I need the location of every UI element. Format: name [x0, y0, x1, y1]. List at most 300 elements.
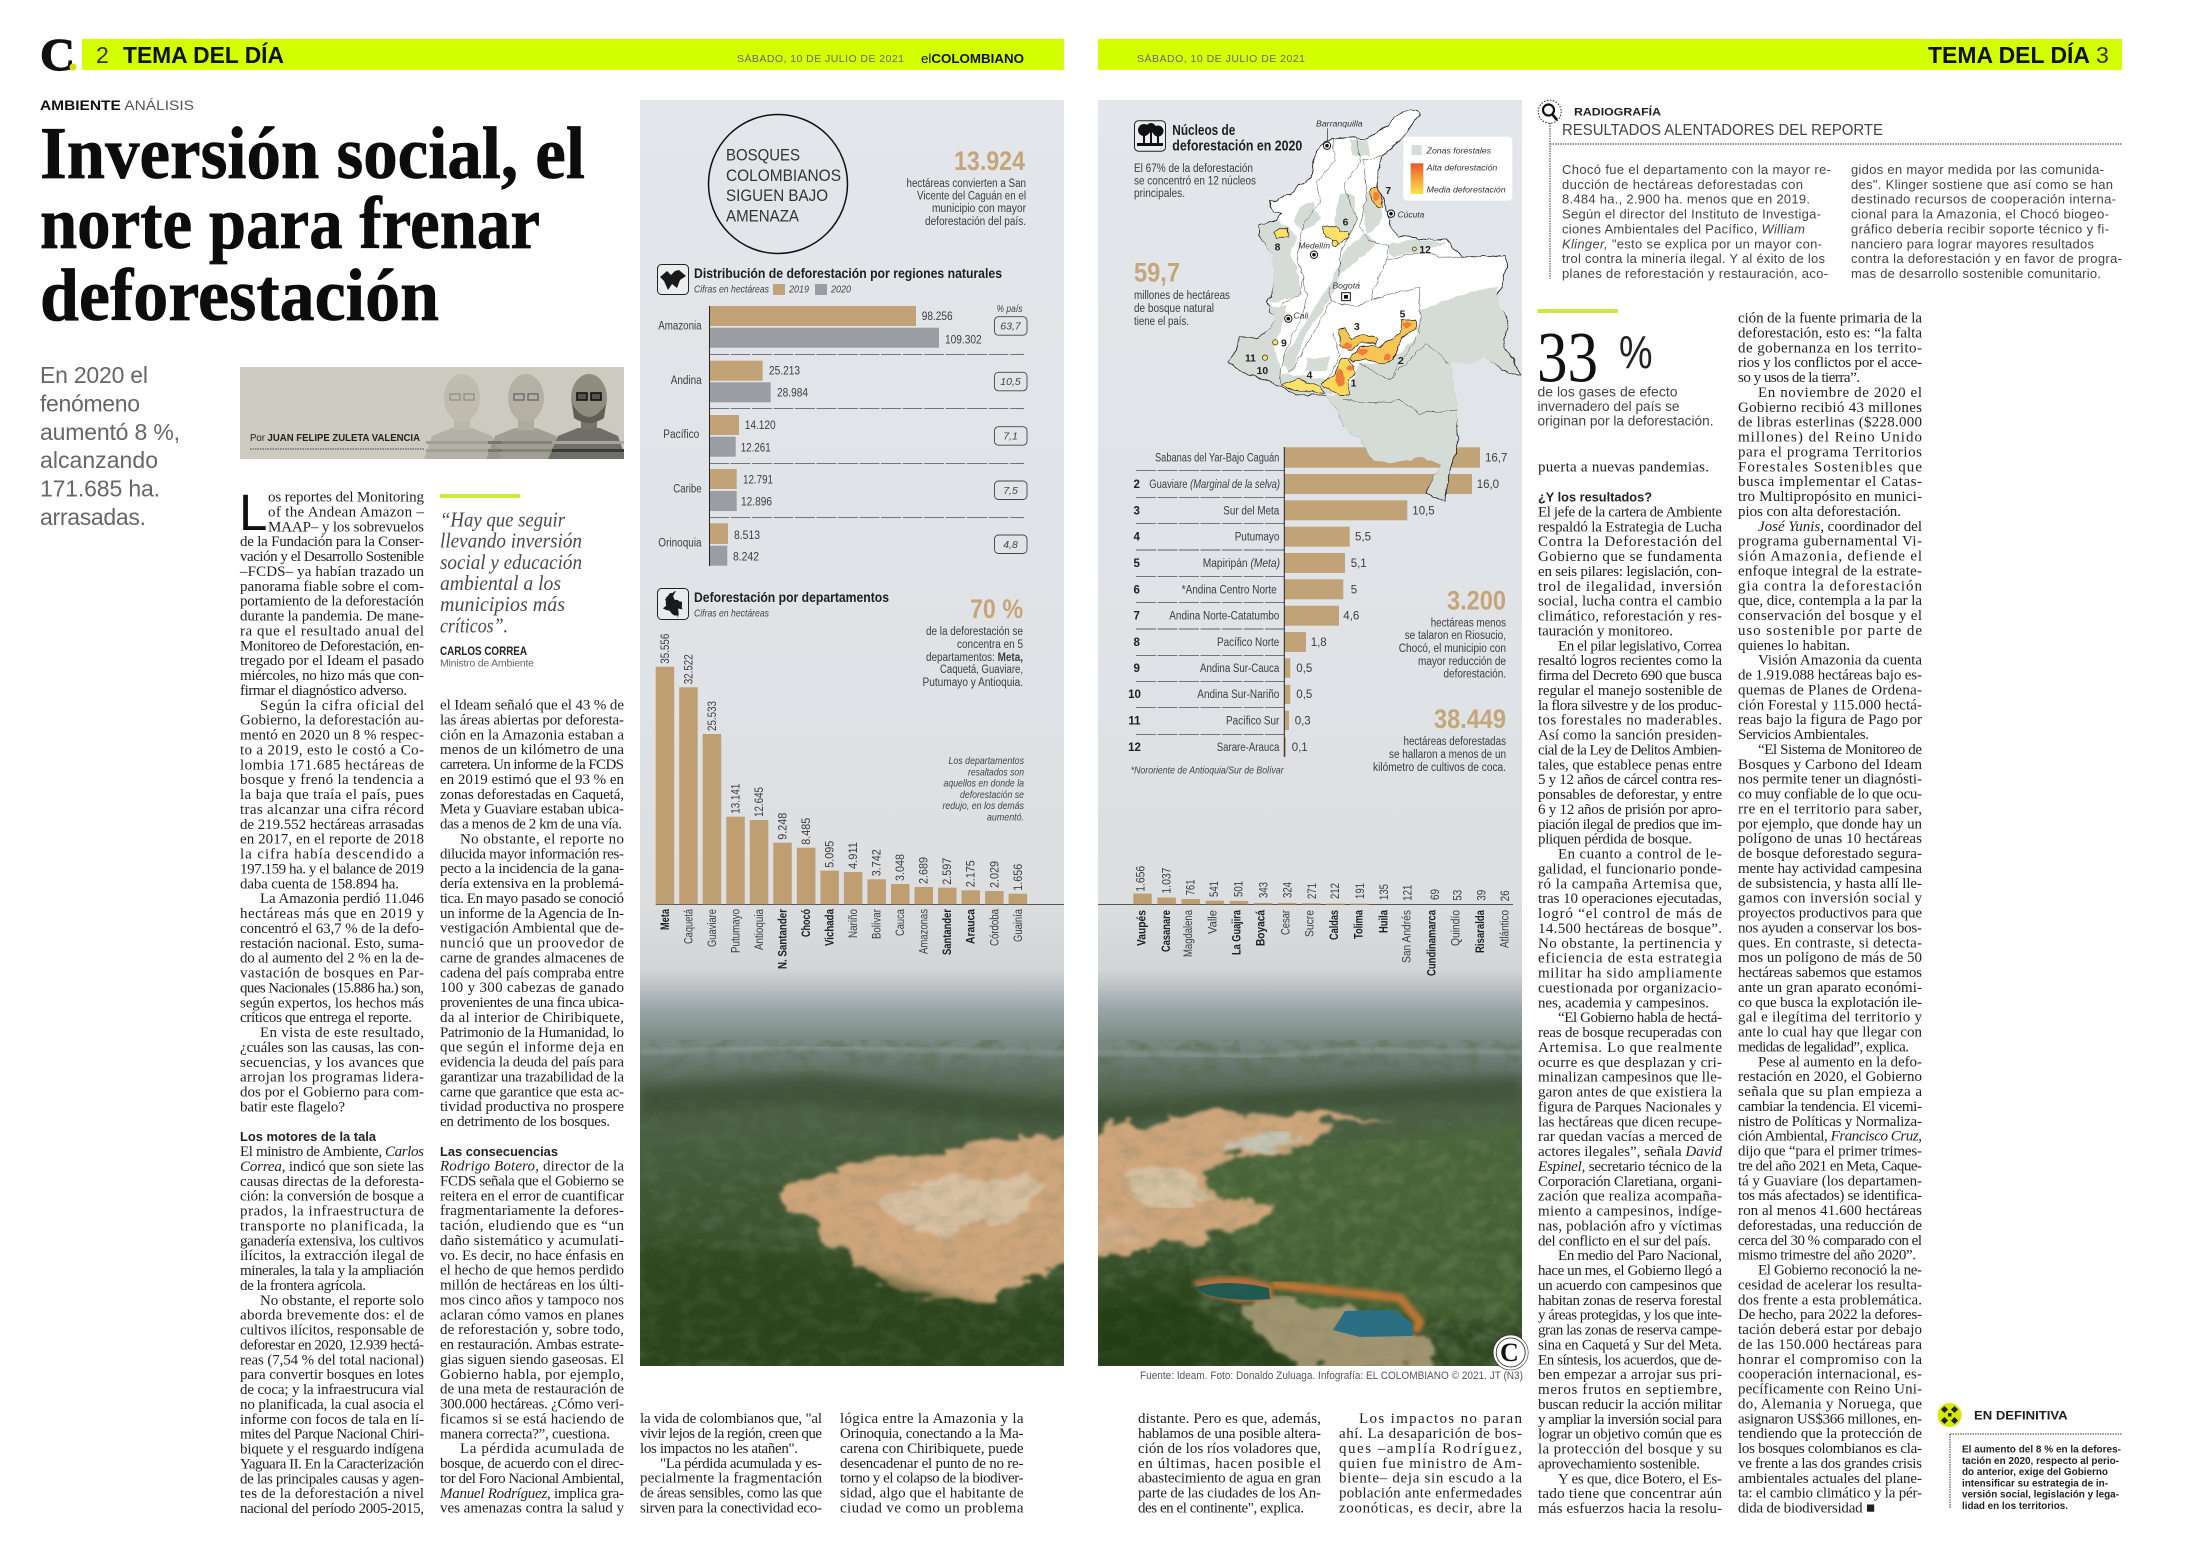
article column 4: de gobernanza en los territo- — [1738, 340, 1922, 356]
article column 1: miércoles, no hizo más que con- — [240, 668, 424, 684]
article column 1 continued: nacional del período 2005-2015, — [240, 1501, 424, 1517]
stat: 33 %: 33 — [1537, 318, 1598, 398]
article column 1 continued: cultivos ilícitos, responsable de — [240, 1322, 424, 1338]
article column 3: Artemisa. Lo que realmente — [1538, 1040, 1722, 1056]
bar chart: deforestation hubs: 4,6 — [1343, 611, 1359, 623]
callout: 38.449: hectáreas deforestadas — [1404, 736, 1506, 748]
article column 3: meros frutos en septiembre, — [1538, 1382, 1722, 1398]
bar chart: departments right: 53 — [1452, 890, 1464, 901]
article column 4: para el programa Territorios — [1738, 444, 1922, 460]
article column 1: tregado por el Ideam el pasado — [240, 653, 424, 669]
article column 2 continued: manera correcta?”, cuestiona. — [440, 1426, 610, 1442]
article column 3: Gobierno que se fundamenta — [1538, 549, 1722, 565]
bar chart: deforestation hubs: Guaviare (Marginal de la selva) — [1149, 479, 1280, 491]
map: colombia deforestation hubs: Barranquilla — [1316, 119, 1363, 129]
article column 3: militar ha sido ampliamente — [1538, 966, 1722, 982]
bottom columns under photo: right: en últimas, hacen posible el — [1138, 1456, 1321, 1472]
article column 3: minalizan campesinos que lle- — [1538, 1070, 1722, 1086]
callout: 38.449: 38.449 — [1434, 704, 1506, 734]
bar chart: regions: 4,8 — [1003, 539, 1018, 551]
article column 4: Forestales Sostenibles que — [1738, 459, 1922, 475]
infographic heading circle: BOSQUES — [726, 147, 800, 165]
article column 3: buscan reducir la acción militar — [1538, 1397, 1722, 1413]
article column 3: la protección del bosque y su — [1538, 1442, 1722, 1458]
bottom columns under photo: right: des en el continente", explica. — [1138, 1500, 1304, 1516]
bar chart: deforestation hubs: 2 — [1133, 479, 1140, 491]
article column 4: cambiar la tendencia. El vicemi- — [1738, 1099, 1922, 1115]
bar chart: departments right: Cundinamarca — [1426, 910, 1438, 976]
article column 3: firma del Decreto 690 que busca — [1538, 668, 1722, 684]
map: colombia deforestation hubs: 12 — [1419, 245, 1431, 256]
article column 2 continued: FCDS señala que el Gobierno se — [440, 1173, 624, 1189]
article column 2 continued: Gobierno habla, por ejemplo, — [440, 1367, 624, 1383]
box: en definitiva: El aumento del 8 % en la defores- — [1962, 1444, 2121, 1456]
article column 4: honrar el compromiso con la — [1738, 1352, 1922, 1368]
bottom columns under photo: right: zoonóticas, es decir, abre la — [1339, 1500, 1522, 1516]
photo logo — [1493, 1335, 1528, 1370]
bar chart: deforestation hubs: Pacífico Sur — [1226, 715, 1279, 727]
article column 4: por ejemplo, que donde hay un — [1738, 816, 1922, 832]
note: highlighted departments: aumentó. — [987, 812, 1024, 824]
bar chart: deforestation hubs: Putumayo — [1235, 532, 1279, 544]
article column 4: ción Forestal y 115.000 hectá- — [1738, 697, 1922, 713]
article column 4: tre del año 2021 en Meta, Caque- — [1738, 1158, 1922, 1174]
bar chart: departments left: 25.533 — [707, 701, 719, 731]
bar chart: departments left: Córdoba — [989, 909, 1001, 946]
sidebar text: radiografía: nanciero para lograr mayores resultados — [1851, 236, 2094, 251]
note: highlighted departments: deforestación se — [960, 789, 1024, 801]
article column 1 continued: Yaguara II. En la Caracterización — [240, 1456, 424, 1472]
article column 4: Servicios Ambientales. — [1738, 727, 1869, 743]
infographic heading circle: SIGUEN BAJO — [726, 187, 828, 205]
article column 4: dijo que “para el primer trimes- — [1738, 1144, 1922, 1160]
article column 3: tauración y monitoreo. — [1538, 623, 1673, 639]
stat: 33 %: % — [1619, 326, 1652, 378]
bar chart: departments left: Bolívar — [872, 909, 884, 939]
box: en definitiva: lidad en los territorios. — [1962, 1500, 2068, 1512]
bottom columns under photo: left: torno y el colapso de la biodiver- — [840, 1471, 1024, 1487]
article column 3: ocurre es que desplazan y cri- — [1538, 1055, 1722, 1071]
article column 2 continued: de una meta de restauración de — [440, 1382, 624, 1398]
pull quote: social y educación — [440, 550, 582, 574]
article column 3: más esfuerzos hacia la resolu- — [1538, 1501, 1722, 1517]
bar chart: departments left: 32.522 — [683, 654, 695, 684]
article column 1: dos por el Gobierno para com- — [240, 1084, 424, 1100]
bar chart: departments left: 2.175 — [966, 860, 978, 887]
article column 4: pecíficamente con Reino Uni- — [1738, 1382, 1922, 1398]
bar chart: regions: Andina — [671, 375, 702, 387]
pull quote: críticos”. — [440, 613, 508, 637]
bar chart: departments right: 271 — [1307, 883, 1319, 899]
bar chart: departments right: 501 — [1233, 881, 1245, 897]
stat: 33 %: invernadero del país se — [1538, 399, 1680, 414]
header bar: left page: TEMA DEL DÍA — [123, 41, 284, 68]
article column 2: carretera. Un informe de la FCDS — [440, 757, 624, 773]
callout: 59,7: de bosque natural — [1134, 303, 1214, 315]
article column 2: evidencia la deuda del país para — [440, 1054, 624, 1070]
article column 3: miento a campesinos, indíge- — [1538, 1204, 1722, 1220]
bar chart: regions: 63,7 — [1000, 320, 1022, 332]
article column 2: Meta y Guaviare estaban ubica- — [440, 802, 624, 818]
article column 2: da al interior de Chiribiquete, — [440, 1010, 624, 1026]
article column 4: ve frente a las dos grandes crisis — [1738, 1456, 1922, 1472]
article column 4: De hecho, para 2022 la defores- — [1738, 1307, 1922, 1323]
text: 67%: se concentró en 12 núcleos — [1134, 176, 1256, 188]
article column 1 continued: minerales, la tala y la ampliación — [240, 1263, 424, 1279]
article column 1: la cifra había descendido a — [240, 846, 424, 862]
article column 3: nes, academia y campesinos. — [1538, 995, 1709, 1011]
article column 1: secuencias, y los avances que — [240, 1055, 424, 1071]
bottom columns under photo: left: sidad, algo que el habitante de — [840, 1486, 1024, 1502]
callout: 3.200: 3.200 — [1447, 585, 1506, 615]
deck text: alcanzando — [40, 447, 158, 473]
bar chart: departments left: Cauca — [895, 909, 907, 936]
bar chart: departments left: Guaviare — [707, 909, 719, 947]
photo credit: Fuente: Ideam. Foto: Donaldo Zuluaga. Infografía: EL COLOMBIANO © 2021. JT (N3) — [1140, 1370, 1523, 1382]
sidebar text: radiografía: ciones Ambientales del Pacífico, William — [1562, 221, 1805, 236]
article column 3: En cuanto a control de le- — [1558, 847, 1722, 863]
article column 1: según expertos, los hechos más — [240, 995, 424, 1011]
article column 4: deforestación, esto es: “la falta — [1738, 325, 1922, 341]
article column 2 continued: en restauración. Ambas estrate- — [440, 1337, 624, 1353]
deck text: 171.685 ha. — [40, 476, 160, 502]
sidebar text: radiografía: trol contra la minería ilegal. Y al éxito de los — [1562, 251, 1826, 266]
bar chart: deforestation hubs: 7 — [1133, 611, 1140, 623]
article column 1: MAAP– y los sobrevuelos — [268, 519, 424, 535]
bar chart: departments right: La Guajira — [1232, 910, 1244, 955]
bar chart: departments left: 2.689 — [919, 857, 931, 884]
bottom columns under photo: right: quien fue ministro de Am- — [1339, 1456, 1522, 1472]
article column 1: En vista de este resultado, — [260, 1025, 424, 1041]
article column 1 continued: de coca; y la infraestrucura vial — [240, 1382, 424, 1398]
bar chart: deforestation hubs: 16,7 — [1485, 452, 1507, 464]
bar chart: departments left: Putumayo — [730, 909, 742, 953]
bar chart: deforestation hubs: Andina Norte-Catatumbo — [1169, 611, 1279, 623]
article column 4: nos ayuden a conservar los bos- — [1738, 920, 1922, 936]
article column 2: cadena del país compraba entre — [440, 965, 624, 981]
bar chart: departments left: 1.656 — [1013, 864, 1025, 891]
article column 4: medidas de legalidad”, explica. — [1738, 1039, 1909, 1055]
article column 1: de 219.552 hectáreas arrasadas — [240, 817, 424, 833]
article column 2 continued: daño sistemático y acumulati- — [440, 1233, 624, 1249]
chart title: regions: Distribución de deforestación por regiones naturales — [694, 266, 1002, 281]
bar chart: deforestation hubs: 1,8 — [1311, 637, 1327, 649]
map: colombia deforestation hubs: 2 — [1398, 356, 1404, 367]
bar chart: deforestation hubs: 5,5 — [1355, 532, 1371, 544]
bottom columns under photo: right: ahí. La desaparición de bos- — [1339, 1426, 1522, 1442]
bar chart: departments right: Boyacá — [1256, 909, 1268, 946]
article column 4: ques. En contraste, si detecta- — [1738, 935, 1922, 951]
article column 4: los bosques colombianos es cla- — [1738, 1441, 1922, 1457]
bottom columns under photo: left: sirven para la conectividad eco- — [640, 1500, 822, 1516]
subheading: los motores: Los motores de la tala — [240, 1130, 377, 1144]
photo logo: C — [1500, 1338, 1519, 1367]
title: norte para frenar — [40, 183, 540, 265]
article column 2: pecto a la incidencia de la gana- — [440, 861, 624, 877]
article column 2: el Ideam señaló que el 43 % de — [440, 698, 624, 714]
bar chart: departments right: 212 — [1330, 883, 1342, 899]
bar chart: deforestation hubs: 5,1 — [1351, 558, 1367, 570]
article column 3: tos forestales no maderables. — [1538, 713, 1722, 729]
article column 1: ques Nacionales (15.886 ha.) son, — [240, 980, 424, 996]
article column 4: restación en 2020, el Gobierno — [1738, 1069, 1922, 1085]
article column 2: dilucida mayor información res- — [440, 846, 624, 862]
subheading: resultados: ¿Y los resultados? — [1538, 490, 1652, 504]
bottom columns under photo: right: abastecimiento de agua en gran — [1138, 1471, 1322, 1487]
article column 1 continued: para convertir bosques en lotes — [240, 1367, 424, 1383]
bar chart: regions: Pacífico — [663, 429, 699, 441]
article column 4: gal e ilegítima del territorio y — [1738, 1010, 1922, 1026]
article column 4: En noviembre de 2020 el — [1758, 385, 1922, 401]
article column 4: de las 150.000 hectáreas para — [1738, 1337, 1922, 1353]
note: highlighted departments: aquellos en donde la — [944, 778, 1024, 790]
article column 4: ambientales actuales del plane- — [1738, 1471, 1922, 1487]
article column 4: hectáreas sabemos que estamos — [1738, 965, 1922, 981]
article column 3: hace un mes, el Gobierno llegó a — [1538, 1263, 1722, 1279]
article column 3: piación ilegal de predios que im- — [1538, 817, 1722, 833]
article column 4: de subsistencia, y hasta allí lle- — [1738, 876, 1922, 892]
article column 4: nos permite tener un diagnósti- — [1738, 772, 1922, 788]
chart title: regions: 2020 — [830, 284, 851, 296]
article column 1 continued: tes de la deforestación a nivel — [240, 1486, 424, 1502]
article column 3: tras 10 operaciones ejecutadas, — [1538, 891, 1722, 907]
bar chart: departments left: 35.556 — [660, 634, 672, 664]
article column 2: das a menos de 2 km de una vía. — [440, 816, 622, 832]
article column 4: proyectos productivos para que — [1738, 906, 1922, 922]
bar chart: departments left: Guainía — [1013, 909, 1025, 942]
article column 1 continued: Correa, indicó que son siete las — [240, 1159, 424, 1175]
map: colombia deforestation hubs — [1228, 110, 1521, 502]
chart title: regions — [694, 266, 1002, 296]
bar chart: deforestation hubs: 16,0 — [1477, 479, 1499, 491]
drop cap: L — [239, 484, 267, 541]
article column 1 continued: de las principales causas y agen- — [240, 1471, 424, 1487]
bar chart: departments right: 1.037 — [1162, 868, 1174, 894]
text: 67% — [1134, 163, 1256, 200]
bar chart: deforestation hubs: 5 — [1351, 584, 1357, 596]
bar chart: departments left — [656, 634, 1064, 969]
article column 2 continued: fragmentariamente la defores- — [440, 1203, 624, 1219]
sidebar text: radiografía: des". Klinger sostiene que así como se han — [1851, 177, 2113, 192]
callout: 13.924 — [906, 146, 1026, 228]
article column 3: trol de ilegalidad, inversión — [1538, 579, 1722, 595]
heading: núcleos: Núcleos de — [1172, 123, 1235, 139]
callout: 3.200: deforestación. — [1444, 669, 1506, 681]
box: en definitiva: do anterior, exige del Gobierno — [1962, 1466, 2108, 1478]
article column 3: ben empezar a arrojar sus pri- — [1538, 1367, 1722, 1383]
deck text: arrasadas. — [40, 504, 146, 530]
map: colombia deforestation hubs: 3 — [1354, 322, 1360, 333]
header bar: left page: C — [40, 29, 75, 80]
article column 4: cesidad de acelerar los resulta- — [1738, 1277, 1922, 1293]
bar chart: departments right: Vaupés — [1136, 910, 1148, 946]
article column 1: la baja que traía el país, pues — [240, 787, 424, 803]
title — [40, 113, 585, 337]
bar chart: departments right: San Andrés — [1402, 910, 1414, 963]
bottom columns under photo: left: carena con Chiribiquete, puede — [840, 1441, 1024, 1457]
bar chart: departments right: 135 — [1379, 884, 1391, 900]
article column 1: ¿cuáles son las causas, las con- — [240, 1040, 424, 1056]
map: colombia deforestation hubs: Media deforestación — [1427, 185, 1506, 195]
bar chart: departments right: Magdalena — [1183, 910, 1195, 957]
article column 3: sina en Caquetá y Sur del Meta. — [1538, 1337, 1722, 1353]
article column 2: en detrimento de los bosques. — [440, 1114, 610, 1130]
article column 3: No obstante, la pertinencia y — [1538, 936, 1722, 952]
bar chart: departments left: Santander — [942, 909, 954, 955]
deck text: En 2020 el — [40, 362, 148, 388]
map: colombia deforestation hubs: 8 — [1275, 243, 1281, 254]
article column 3: ponsables de deforestar, y entre — [1538, 787, 1722, 803]
article column 4: mente hay actividad campesina — [1738, 861, 1922, 877]
article column 4: ante lo cual hay que llegar con — [1738, 1024, 1922, 1040]
callout: 3.200: Chocó, el municipio con — [1399, 643, 1506, 655]
article column 1: ra que el resultado anual del — [240, 623, 424, 639]
bar chart: departments right: Quindío — [1450, 910, 1462, 946]
header bar: left page: 2 — [96, 42, 109, 68]
article column 3: nas, población afro y víctimas — [1538, 1218, 1722, 1234]
article column 3: cuestionada por organizacio- — [1538, 980, 1722, 996]
article column 1: concentró el 63,7 % de la defo- — [240, 921, 424, 937]
bar chart: regions: 7,1 — [1003, 430, 1018, 442]
sidebar rules — [1550, 123, 2122, 279]
bar chart: deforestation hubs: 0,1 — [1292, 742, 1308, 754]
bottom columns under photo: left: vivir lejos de la región, creen que — [640, 1426, 822, 1442]
article column 4: tación deberá estar por debajo — [1738, 1322, 1922, 1338]
bottom columns under photo: left: desencadenar el punto de no re- — [840, 1456, 1024, 1472]
bar chart: departments right: 761 — [1186, 879, 1198, 895]
bar chart: departments right: Huila — [1378, 910, 1390, 933]
callout: 13.924: hectáreas convierten a San — [906, 178, 1026, 190]
article column 4: rre en el territorio para saber, — [1738, 801, 1922, 817]
article column 2: Patrimonio de la Humanidad, lo — [440, 1025, 624, 1041]
article column 2 continued: gias siguen siendo gaseosas. El — [440, 1352, 624, 1368]
icon: colombia map — [658, 588, 688, 620]
map: colombia deforestation hubs: 1 — [1351, 379, 1357, 390]
callout: 70 %: departamentos: Meta, — [926, 652, 1023, 664]
bottom columns under photo: left: Orinoquia, conectando a la Ma- — [840, 1426, 1024, 1442]
article column 3: galidad, el funcionario ponde- — [1538, 861, 1722, 877]
bar chart: departments right: Risaralda — [1475, 910, 1487, 953]
article column 4: de 1.919.088 hectáreas bajo es- — [1738, 668, 1922, 684]
box: en definitiva: tación en 2020, respecto al perio- — [1962, 1455, 2119, 1467]
bottom columns under photo: left: "La pérdida acumulada y es- — [660, 1456, 822, 1472]
bar chart: departments right: 343 — [1258, 882, 1270, 898]
article column 4: asignaron US$366 millones, en- — [1738, 1411, 1922, 1427]
bar chart: deforestation hubs: 8 — [1133, 637, 1140, 649]
map: colombia deforestation hubs: Cali — [1293, 310, 1310, 320]
article column 4: tro Multipropósito en munici- — [1738, 489, 1922, 505]
bar chart: regions: 25.213 — [769, 366, 800, 378]
article column 2 continued: vo. Es decir, no hace énfasis en — [440, 1248, 624, 1264]
article column 2: zonas deforestadas en Caquetá, — [440, 787, 624, 803]
stat: 33 %: de los gases de efecto — [1538, 385, 1678, 400]
bar chart: regions — [658, 303, 1027, 566]
bar chart: regions: 8.513 — [734, 530, 760, 542]
bar chart: departments left: 5.095 — [825, 841, 837, 868]
bottom columns under photo: right: parte de las ciudades de los An- — [1138, 1486, 1321, 1502]
bottom columns under photo: left: pecialmente la fragmentación — [640, 1471, 822, 1487]
article column 4: Gobierno recibió 43 millones — [1738, 400, 1922, 416]
infographic heading circle: COLOMBIANOS — [726, 167, 841, 185]
chart title: departments: Cifras en hectáreas — [694, 608, 770, 620]
bar chart: departments left: 2.597 — [942, 858, 954, 885]
article column 4: co que busca la explotación ile- — [1738, 995, 1922, 1011]
article column 4: tendiendo que la protección de — [1738, 1426, 1922, 1442]
callout: 38.449: kilómetro de cultivos de coca. — [1373, 762, 1506, 774]
article column 3: Y es que, dice Botero, el Es- — [1558, 1471, 1722, 1487]
callout: 13.924: deforestación del país. — [925, 216, 1026, 228]
article column 3: y áreas protegidas, y los que inte- — [1538, 1308, 1722, 1324]
article column 4: cerca del 30 % comparado con el — [1738, 1233, 1922, 1249]
article column 4: ron al menos 41.600 hectáreas — [1738, 1203, 1922, 1219]
bottom columns under photo: right: población ante enfermedades — [1339, 1486, 1522, 1502]
bar chart: departments right: 191 — [1355, 883, 1367, 899]
sidebar text: radiografía: gráfico debería recibir soporte técnico y fi- — [1851, 221, 2109, 236]
article column 3: climático, reforestación y res- — [1538, 609, 1722, 625]
bar chart: regions: Amazonia — [658, 321, 702, 333]
article column 3: Así como la sanción presiden- — [1538, 728, 1722, 744]
bar chart: regions: 12.791 — [743, 474, 773, 486]
heading: núcleos: deforestación en 2020 — [1172, 139, 1302, 155]
article column 1 continued: transporte no planificada, la — [240, 1218, 424, 1234]
sidebar text: radiografía: gidos en mayor medida por las comunida- — [1851, 162, 2104, 177]
article column 1: vación y el Desarrollo Sostenible — [240, 549, 424, 565]
callout: 3.200 — [1399, 585, 1506, 681]
article column 3: del conflicto en el sur del país. — [1538, 1233, 1711, 1249]
bar chart: departments left: Nariño — [848, 909, 860, 938]
header bar: left page: elCOLOMBIANO — [921, 51, 1024, 66]
article column 1 continued: informe con focos de tala en lí- — [240, 1412, 424, 1428]
bar chart: regions: Orinoquia — [658, 537, 702, 549]
callout: 59,7: 59,7 — [1134, 258, 1180, 288]
header bar: right page: SÁBADO, 10 DE JULIO DE 2021 — [1137, 52, 1305, 65]
bar chart: regions: 7,5 — [1003, 485, 1018, 497]
article column 4: Visión Amazonia da cuenta — [1758, 653, 1922, 669]
icon: en definitiva — [1938, 1403, 1962, 1427]
infographic heading circle — [708, 114, 848, 254]
bar chart: deforestation hubs: 10 — [1128, 689, 1141, 701]
title: Inversión social, el — [40, 113, 585, 195]
article column 2: que según el informe deja en — [440, 1040, 624, 1056]
article column 2 continued: tación, eludiendo que es “un — [440, 1218, 624, 1234]
article column 4: conservación del bosque y el — [1738, 608, 1922, 624]
bar chart: deforestation hubs: *Andina Centro Norte — [1182, 584, 1277, 596]
article column 4: José Yunis, coordinador del — [1758, 519, 1922, 535]
article column 1: Según la cifra oficial del — [260, 698, 424, 714]
article column 1: hectáreas más que en 2019 y — [240, 906, 424, 922]
article column 3: Contra la Deforestación del — [1538, 534, 1722, 550]
bar chart: departments right — [1098, 866, 1513, 976]
map: colombia deforestation hubs: 7 — [1385, 186, 1391, 197]
callout: 59,7 — [1134, 258, 1230, 328]
article column 1 continued: reas (7,54 % del total nacional) — [240, 1352, 424, 1368]
bar chart: departments right: 1.656 — [1136, 866, 1148, 892]
callout: 3.200: se talaron en Riosucio, — [1405, 630, 1506, 642]
bottom columns under photo: right: ques –amplía Rodríguez, — [1339, 1441, 1522, 1457]
bar chart: deforestation hubs: *Nororiente de Antioquia/Sur de Bolívar — [1131, 764, 1284, 776]
article column 3: pliquen pérdida de bosque. — [1538, 832, 1692, 848]
bar chart: deforestation hubs: Sur del Meta — [1223, 505, 1280, 517]
article column 4: El Gobierno reconoció la ne- — [1758, 1262, 1922, 1278]
article column 2: carne que garantice que esta ac- — [440, 1084, 624, 1100]
bar chart: deforestation hubs: 10,5 — [1412, 505, 1435, 517]
article column 2 continued: Manuel Rodríguez, implica gra- — [440, 1486, 624, 1502]
article column 3: tales, que establece penas entre — [1538, 757, 1722, 773]
stat: 33 % — [1537, 309, 1714, 429]
article column 2: No obstante, el reporte no — [460, 831, 624, 847]
bar chart: deforestation hubs: Andina Sur-Cauca — [1200, 663, 1280, 675]
bar chart: departments right: Caldas — [1329, 910, 1341, 940]
